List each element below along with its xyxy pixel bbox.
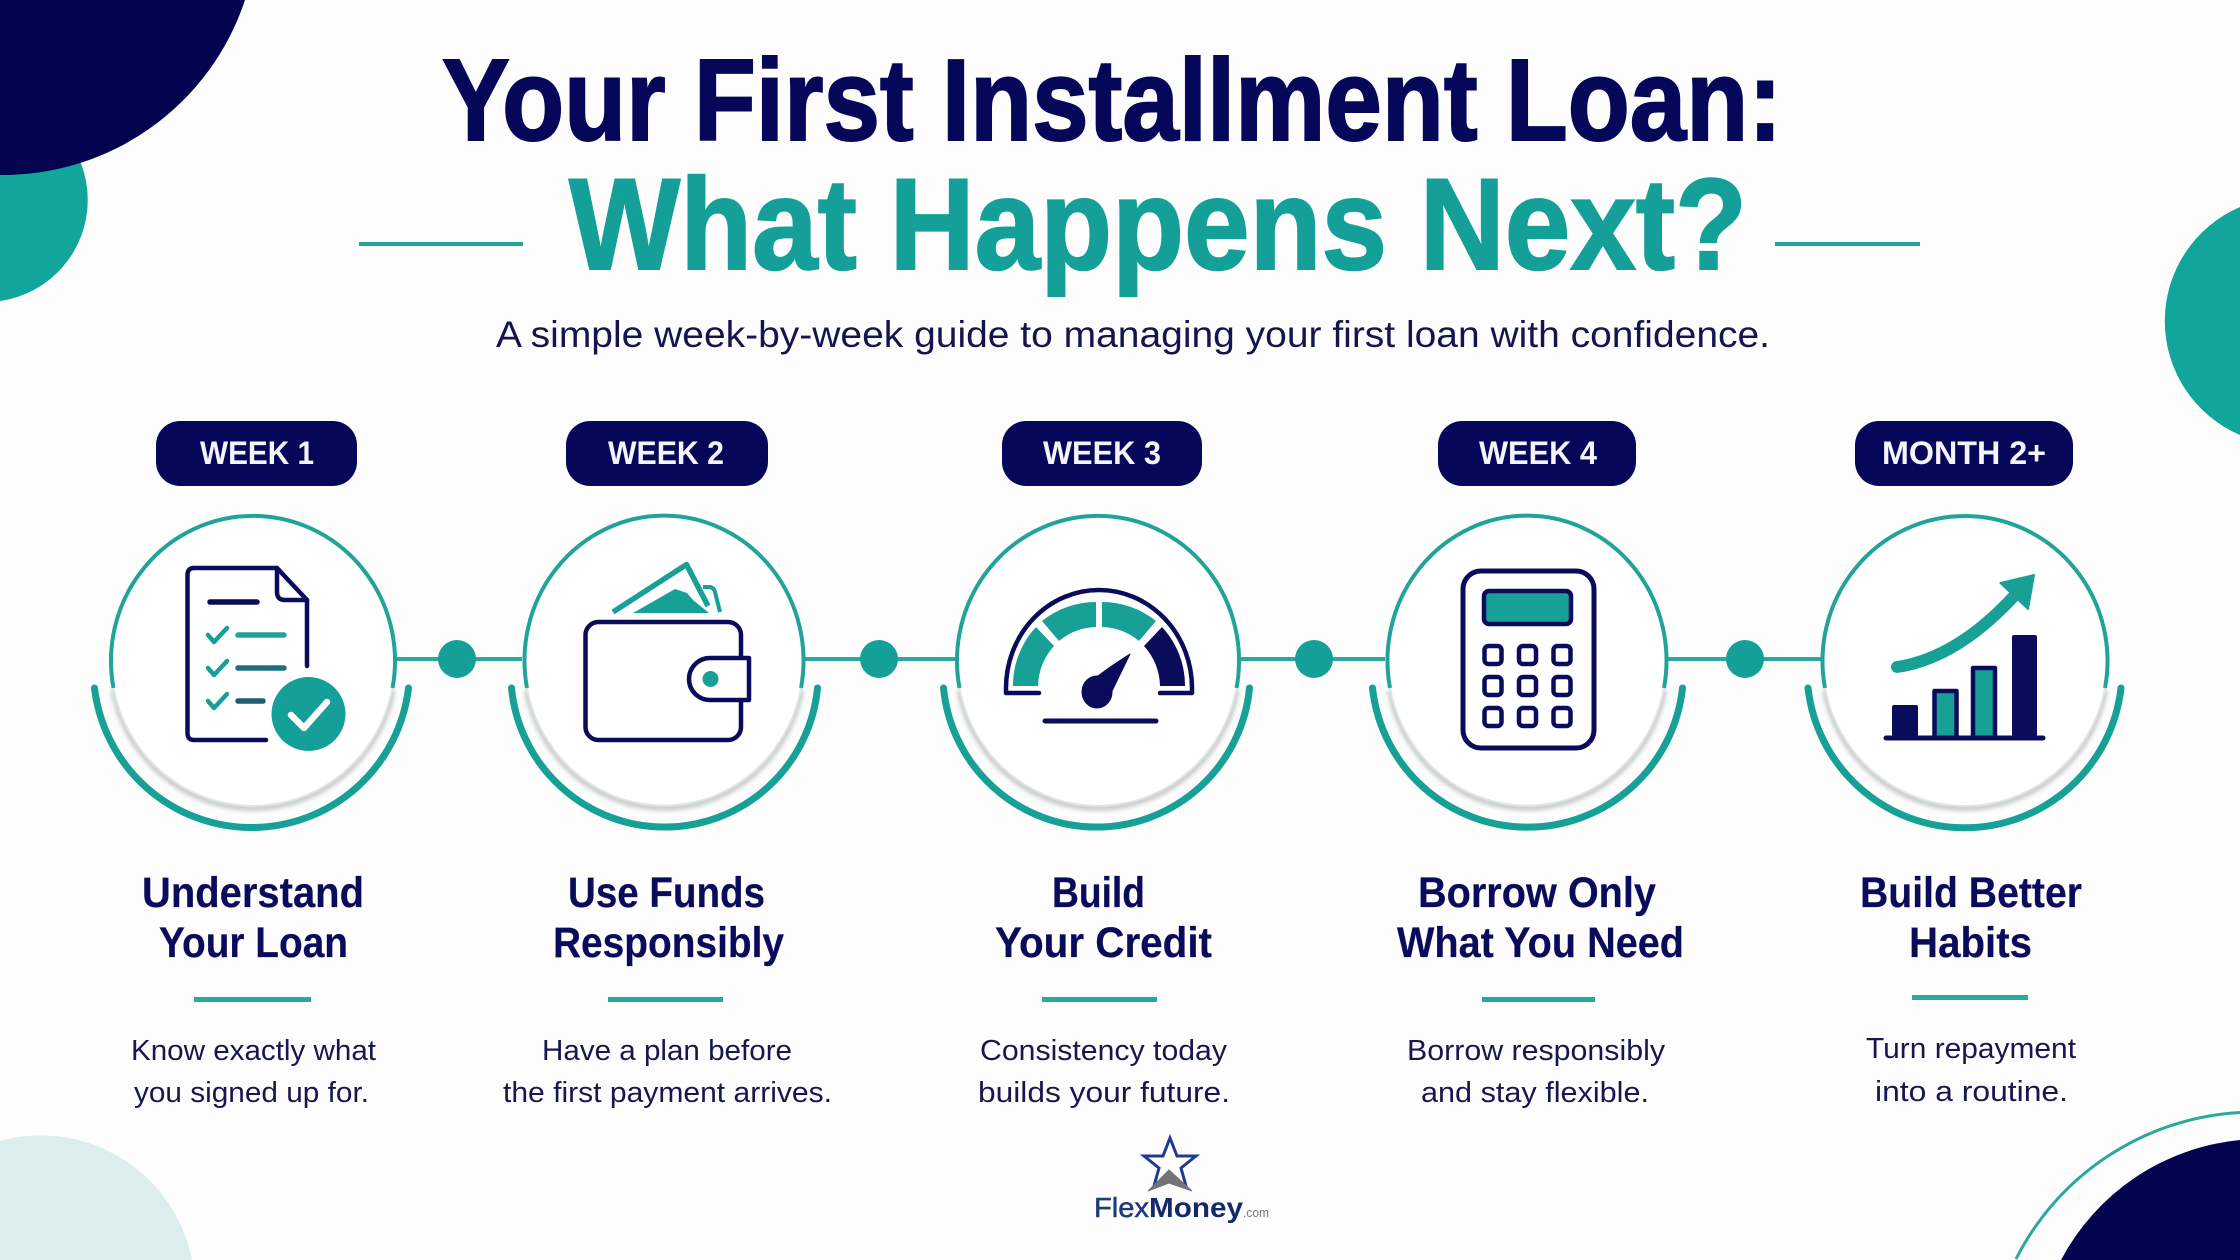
week 4 heading — [1397, 869, 1684, 967]
month 2+ ring — [1808, 516, 2121, 828]
week 3 heading: Your Credit — [995, 919, 1212, 967]
week 1 heading — [142, 869, 364, 967]
week 2 description — [503, 1035, 832, 1109]
week 3 heading — [995, 869, 1212, 967]
week 1 heading: Understand — [142, 869, 364, 917]
week 3 divider — [1042, 997, 1157, 1002]
week 2 heading: Use Funds — [568, 869, 765, 917]
icon: credit score gauge — [1006, 590, 1192, 721]
logo wordmark: FlexMoney .com — [1094, 1192, 1269, 1223]
week 4 badge — [1438, 421, 1636, 486]
week 2 divider — [608, 997, 723, 1002]
week 2 badge: WEEK 2 — [608, 435, 724, 471]
month 2+ divider — [1912, 995, 2028, 1000]
week 4 ring — [1372, 516, 1682, 827]
week 3 description: Consistency today — [980, 1035, 1228, 1067]
week 1 description — [131, 1035, 376, 1109]
timeline connector — [397, 640, 1821, 678]
week 1 description: Know exactly what — [131, 1035, 376, 1067]
icon: logo star — [1144, 1138, 1196, 1191]
week 2 badge — [566, 421, 768, 486]
week 4 description — [1407, 1035, 1666, 1109]
week 4 badge: WEEK 4 — [1479, 435, 1597, 471]
week 2 description: Have a plan before — [542, 1035, 792, 1067]
week 2 heading: Responsibly — [553, 919, 784, 967]
week 1 heading: Your Loan — [159, 919, 348, 967]
title line 2: What Happens Next? — [569, 151, 1747, 297]
week 1 description: you signed up for. — [134, 1077, 369, 1109]
decorative corner: bottom right navy circle and ring — [2016, 1112, 2240, 1260]
panel: week 2 — [503, 421, 832, 1109]
week 4 heading: What You Need — [1397, 919, 1684, 967]
title rule left — [359, 242, 523, 246]
week 1 ring — [94, 516, 408, 827]
subtitle: A simple week-by-week guide to managing your first loan with confidence. — [496, 314, 1770, 355]
week 3 ring — [944, 516, 1250, 827]
week 2 ring — [512, 516, 818, 827]
month 2+ heading: Habits — [1909, 919, 2032, 967]
decorative corner: right teal circle — [2165, 207, 2240, 435]
icon: wallet with cash — [586, 564, 749, 740]
title rule right — [1775, 242, 1920, 246]
week 1 badge — [156, 421, 357, 486]
week 3 description: builds your future. — [978, 1077, 1230, 1109]
week 4 heading: Borrow Only — [1418, 869, 1656, 917]
logo: FlexMoney — [1094, 1138, 1269, 1223]
month 2+ description: Turn repayment — [1866, 1033, 2076, 1065]
panel: week 1 — [94, 421, 408, 1109]
icon: document checklist — [188, 568, 346, 751]
decorative corner: bottom left pale circle — [0, 1135, 192, 1260]
week 4 description: Borrow responsibly — [1407, 1035, 1666, 1067]
icon: growth bar chart with arrow — [1886, 575, 2043, 738]
week 2 heading — [553, 869, 784, 967]
panel: month 2+ — [1808, 421, 2121, 1108]
week 4 description: and stay flexible. — [1421, 1077, 1649, 1109]
title line 1: Your First Installment Loan: — [442, 35, 1782, 165]
decorative corner: top left circles — [0, 0, 245, 301]
panel: week 3 — [944, 421, 1250, 1109]
week 3 badge — [1002, 421, 1202, 486]
week 3 description — [978, 1035, 1230, 1109]
week 2 description: the first payment arrives. — [503, 1077, 832, 1109]
week 1 badge: WEEK 1 — [200, 435, 314, 471]
month 2+ badge — [1855, 421, 2073, 486]
icon: calculator — [1463, 571, 1594, 748]
week 3 heading: Build — [1052, 869, 1145, 917]
week 4 divider — [1482, 997, 1595, 1002]
title — [359, 35, 1920, 297]
month 2+ badge: MONTH 2+ — [1882, 435, 2046, 471]
month 2+ heading — [1860, 869, 2082, 967]
panel: week 4 — [1372, 421, 1684, 1109]
week 3 badge: WEEK 3 — [1043, 435, 1161, 471]
week 1 divider — [194, 997, 311, 1002]
month 2+ description — [1866, 1033, 2076, 1108]
month 2+ description: into a routine. — [1875, 1076, 2068, 1108]
month 2+ heading: Build Better — [1860, 869, 2082, 917]
